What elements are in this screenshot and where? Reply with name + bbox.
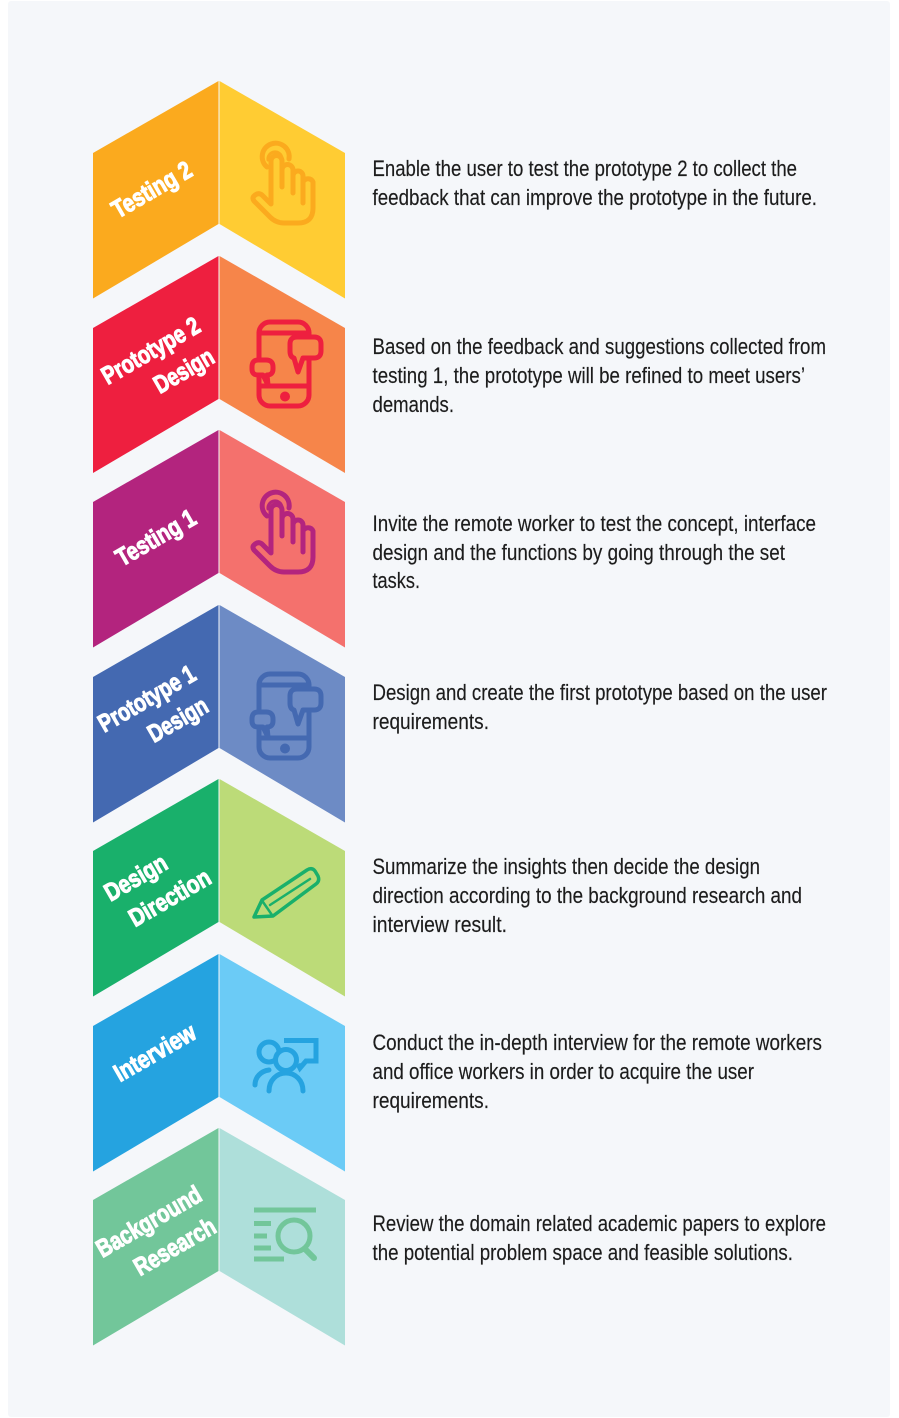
description: Prototype 2 Design: Based on the feedback and suggestions collected from bbox=[372, 334, 826, 359]
right chevron: Testing 2 bbox=[220, 81, 345, 298]
description: Testing 2: Enable the user to test the prototype 2 to collect the bbox=[372, 156, 797, 181]
description: Testing 2: feedback that can improve the prototype in the future. bbox=[372, 185, 817, 210]
description: Background Research: Review the domain related academic papers to explore bbox=[372, 1211, 826, 1236]
right chevron: Interview bbox=[220, 954, 345, 1172]
left chevron: Background Research bbox=[93, 1128, 218, 1346]
description: Interview: Conduct the in-depth interview for the remote workers bbox=[372, 1030, 822, 1055]
label: Prototype 1 Design bbox=[93, 660, 213, 748]
panel: Interview step bbox=[93, 954, 822, 1172]
description: Prototype 1 Design: requirements. bbox=[372, 709, 489, 734]
description: Prototype 1 Design: Design and create the first prototype based on the user bbox=[372, 680, 827, 705]
label: Design Direction bbox=[100, 849, 216, 933]
label: Interview: Interview bbox=[109, 1018, 201, 1088]
label: Background Research bbox=[91, 1181, 221, 1282]
left chevron: Testing 2 bbox=[93, 81, 218, 298]
label: Prototype 1 Design: Prototype 1 bbox=[93, 660, 201, 738]
description: Design Direction bbox=[372, 854, 802, 937]
panel: Testing 2 step bbox=[93, 81, 817, 298]
left chevron: Prototype 1 Design bbox=[93, 605, 218, 822]
label: Testing 2: Testing 2 bbox=[107, 156, 197, 224]
description: Testing 1: design and the functions by going through the set bbox=[372, 540, 785, 565]
label: Background Research: Research bbox=[129, 1212, 221, 1282]
description: Design Direction: interview result. bbox=[372, 912, 507, 937]
panel: Design Direction step bbox=[93, 779, 802, 996]
description: Background Research: the potential problem space and feasible solutions. bbox=[372, 1240, 793, 1265]
panel: Background Research step bbox=[91, 1128, 826, 1346]
icon: document search bbox=[254, 1210, 316, 1259]
description: Prototype 1 Design bbox=[372, 680, 827, 734]
panel: Testing 1 step bbox=[93, 430, 816, 648]
label: Testing 1: Testing 1 bbox=[111, 504, 201, 572]
label: Design Direction: Design bbox=[100, 849, 172, 907]
left chevron: Prototype 2 Design bbox=[93, 256, 218, 473]
description: Testing 2 bbox=[372, 156, 817, 210]
right chevron: Background Research bbox=[220, 1128, 345, 1346]
label: Design Direction: Direction bbox=[124, 863, 216, 933]
left chevron: Testing 1 bbox=[93, 430, 218, 648]
label: Prototype 2 Design: Prototype 2 bbox=[97, 312, 205, 390]
label: Prototype 1 Design: Design bbox=[143, 692, 213, 748]
left chevron: Design Direction bbox=[93, 779, 218, 996]
label: Prototype 2 Design: Design bbox=[149, 343, 219, 399]
icon: pencil bbox=[254, 869, 319, 917]
description: Prototype 2 Design: demands. bbox=[372, 392, 454, 417]
icon: tapping hand bbox=[253, 492, 313, 572]
label: Background Research: Background bbox=[91, 1181, 207, 1263]
description: Prototype 2 Design bbox=[372, 334, 826, 417]
description: Interview: and office workers in order to acquire the user bbox=[372, 1059, 754, 1084]
description: Interview: requirements. bbox=[372, 1088, 489, 1113]
right chevron: Prototype 1 Design bbox=[220, 605, 345, 822]
right chevron: Design Direction bbox=[220, 779, 345, 996]
icon: phone with chat bubbles bbox=[252, 322, 321, 406]
left chevron: Interview bbox=[93, 954, 218, 1172]
right chevron: Prototype 2 Design bbox=[220, 256, 345, 473]
description: Testing 1: Invite the remote worker to test the concept, interface bbox=[372, 511, 816, 536]
description: Interview bbox=[372, 1030, 822, 1113]
description: Design Direction: direction according to the background research and bbox=[372, 883, 802, 908]
icon: people with speech bubble bbox=[255, 1040, 316, 1091]
panel: Prototype 1 Design step bbox=[93, 605, 827, 822]
description: Testing 1: tasks. bbox=[372, 568, 420, 593]
panel: Prototype 2 Design step bbox=[93, 256, 826, 473]
icon: phone with chat bubbles bbox=[252, 674, 321, 758]
description: Testing 1 bbox=[372, 511, 816, 593]
description: Prototype 2 Design: testing 1, the prototype will be refined to meet users’ bbox=[372, 363, 805, 388]
icon: tapping hand bbox=[253, 143, 313, 223]
description: Design Direction: Summarize the insights then decide the design bbox=[372, 854, 760, 879]
description: Background Research bbox=[372, 1211, 826, 1265]
right chevron: Testing 1 bbox=[220, 430, 345, 648]
